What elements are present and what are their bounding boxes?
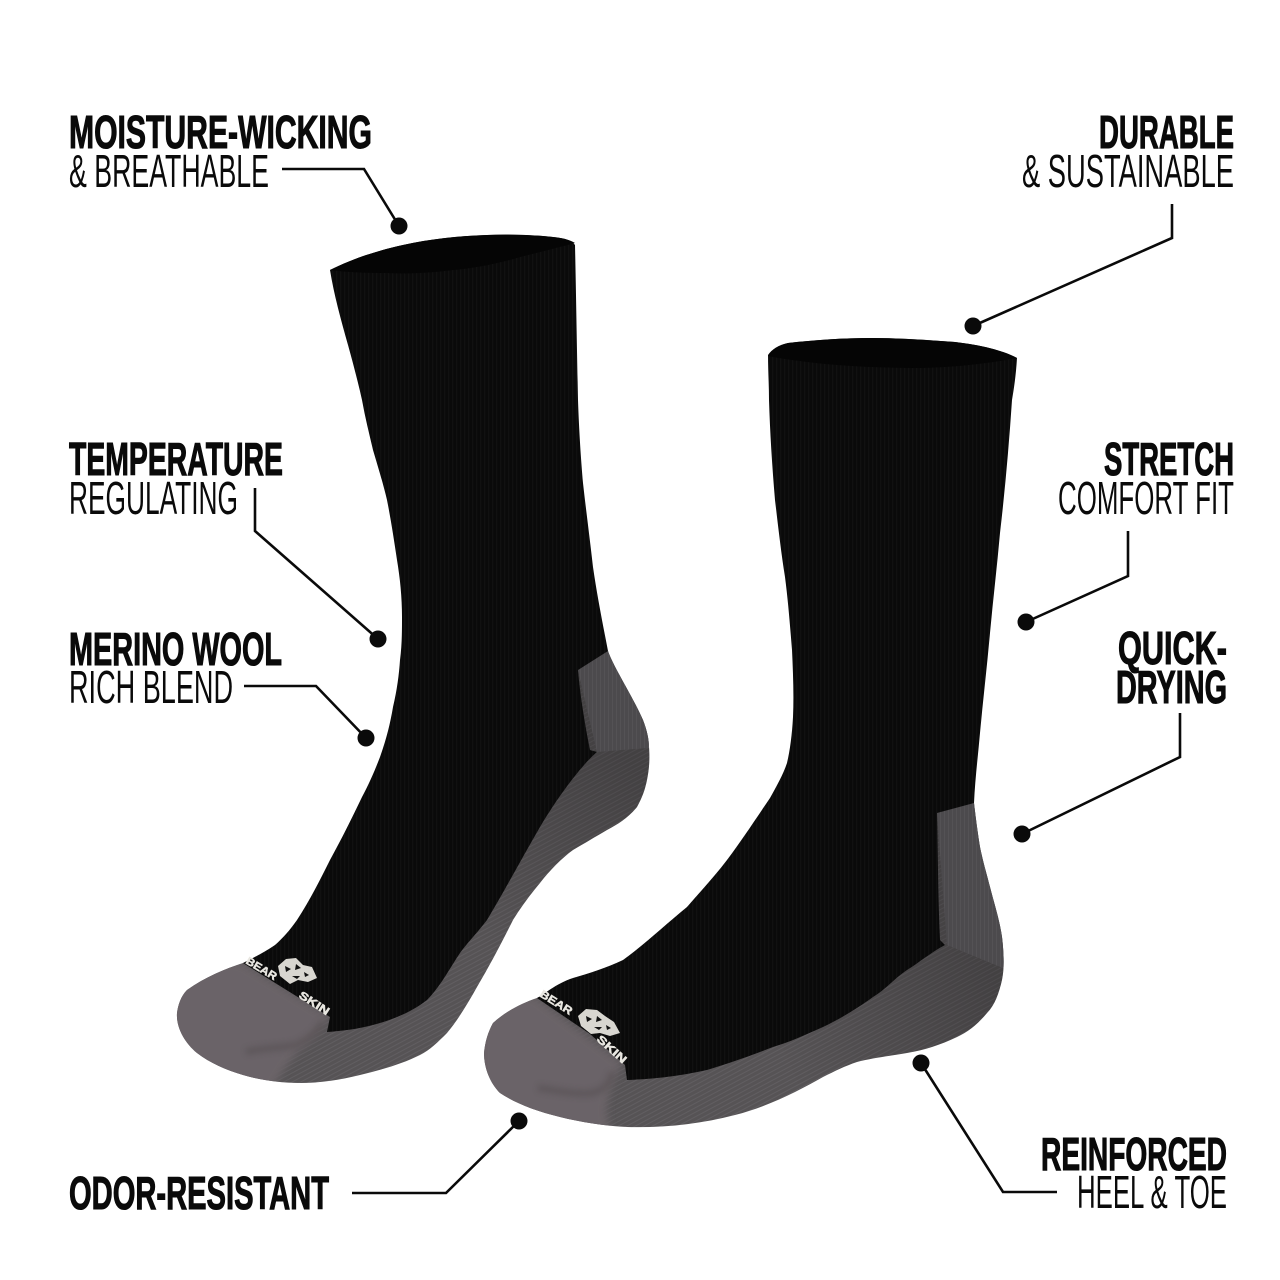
right sock cuff opening (768, 338, 1017, 368)
callout: quick-drying (1014, 622, 1227, 842)
left sock black body (243, 235, 608, 1032)
callout: temperature regulating: REGULATING (69, 472, 238, 524)
callout: moisture-wicking and breathable: MOISTURE-WICKING (69, 106, 372, 158)
left sock toe shading (249, 1025, 322, 1053)
left sock cuff opening (330, 235, 575, 273)
right sock black body (537, 338, 1017, 1080)
right sock logo: SKIN (594, 1033, 629, 1066)
callout: reinforced heel and toe (912, 1054, 1227, 1218)
left sock logo: BEAR (243, 955, 279, 983)
right sock logo (537, 988, 629, 1066)
callout: merino wool rich blend: MERINO WOOL (69, 623, 282, 675)
callout: temperature regulating (69, 433, 386, 648)
left sock logo: SKIN (296, 989, 331, 1018)
left sock (170, 235, 660, 1090)
callout: merino wool rich blend: RICH BLEND (69, 661, 233, 713)
callout: stretch comfort fit (1018, 433, 1234, 630)
callout: odor-resistant (69, 1112, 528, 1219)
left sock heel panel (578, 651, 650, 752)
callout: merino wool rich blend (69, 623, 374, 746)
callout: moisture-wicking and breathable (69, 106, 408, 234)
left sock gray sole and heel (170, 640, 660, 1090)
callout: moisture-wicking and breathable: & BREATHABLE (69, 145, 269, 197)
right sock toe cap (484, 998, 621, 1126)
right sock toe shading (538, 1072, 612, 1093)
right sock logo: BEAR (537, 988, 574, 1018)
right sock (480, 338, 1017, 1135)
callout: quick-drying: QUICK- (1118, 622, 1227, 674)
left sock logo (243, 955, 331, 1018)
right sock heel panel (937, 803, 1004, 968)
callout: temperature regulating: TEMPERATURE (69, 433, 283, 485)
callout: durable and sustainable (964, 106, 1234, 334)
callout: odor-resistant: ODOR-RESISTANT (69, 1167, 329, 1219)
left sock toe cap (176, 963, 328, 1082)
right sock gray sole and heel (484, 803, 1004, 1128)
